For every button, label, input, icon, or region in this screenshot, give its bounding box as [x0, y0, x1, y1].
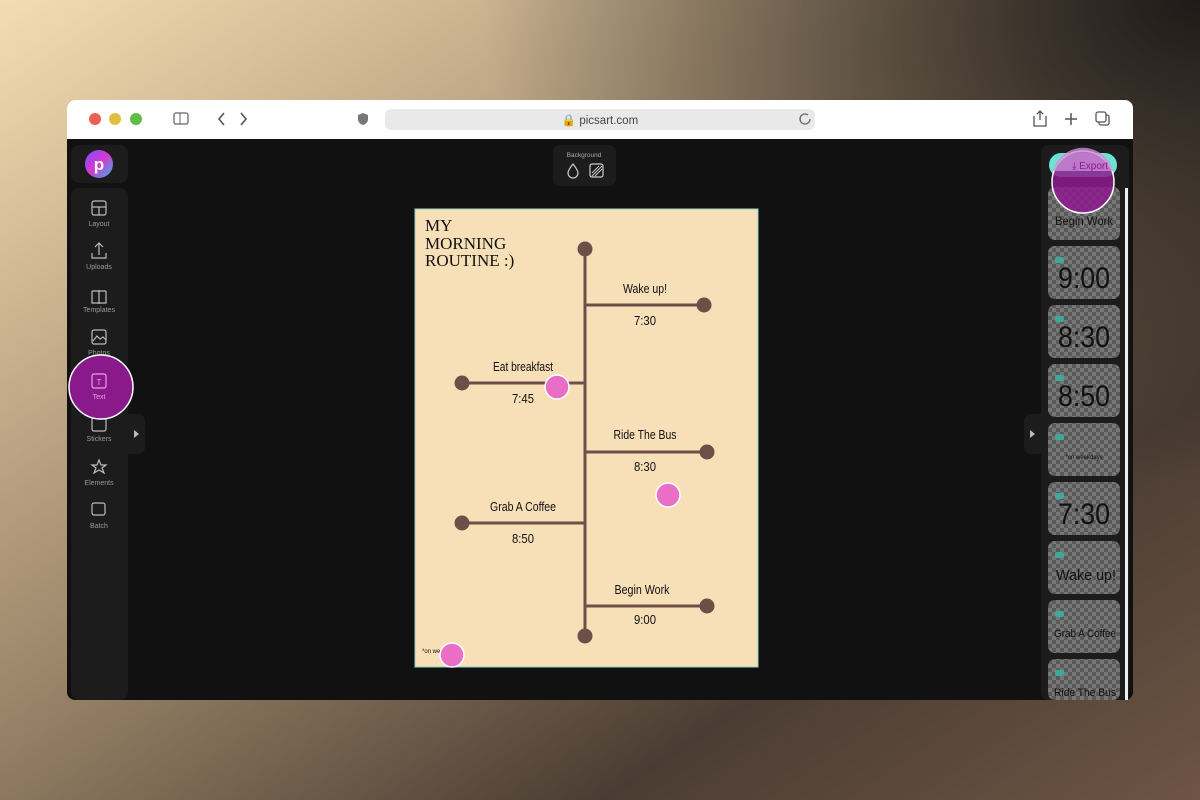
right layers panel: Grab A Coffee [1054, 628, 1116, 640]
address bar [385, 109, 815, 130]
left sidebar: Elements [84, 480, 114, 487]
left sidebar: Layout [88, 221, 110, 228]
title: ROUTINE :) [425, 251, 514, 270]
export button [1049, 148, 1117, 213]
timeline [462, 249, 707, 636]
canvas poster: 7:30 [634, 314, 656, 328]
right layers panel: 9:00 [1058, 262, 1110, 295]
right layers panel: Begin Work [1055, 214, 1114, 228]
labels: Wake up! [623, 282, 667, 296]
canvas poster: 9:00 [634, 613, 656, 627]
right layers panel [1024, 145, 1129, 700]
left sidebar: Templates [83, 307, 115, 314]
left sidebar: Batch [90, 523, 108, 530]
right layers panel: *on weekdays [1065, 455, 1103, 461]
left sidebar: Uploads [86, 264, 112, 271]
highlight: Text tool: Text [93, 394, 105, 401]
browser window [67, 100, 1133, 700]
canvas poster: Grab A Coffee [490, 500, 556, 514]
right layers panel: Wake up! [1056, 567, 1116, 584]
left sidebar: Stickers [87, 436, 112, 443]
left sidebar: p [94, 155, 104, 174]
left sidebar: Photos [88, 350, 110, 357]
browser toolbar [67, 100, 1133, 139]
canvas poster: *on weekdays [422, 649, 459, 655]
title: MY [425, 216, 452, 235]
canvas poster: Eat breakfast [493, 360, 553, 374]
highlight: Text tool: T [97, 378, 102, 387]
canvas poster: 8:50 [512, 532, 534, 546]
title: MORNING [425, 234, 506, 253]
canvas poster: Begin Work [614, 583, 670, 597]
canvas poster: 8:30 [634, 460, 656, 474]
background toolbar [553, 145, 616, 186]
right layers panel: 8:30 [1058, 321, 1110, 354]
canvas poster: 7:45 [512, 392, 534, 406]
right layers panel: 8:50 [1058, 380, 1110, 413]
export button: ⤓ Export [1072, 161, 1108, 172]
right layers panel: 7:30 [1058, 498, 1110, 531]
canvas poster: Ride The Bus [614, 428, 676, 442]
touch markers [440, 375, 680, 667]
background toolbar: Background [567, 152, 602, 159]
right layers panel: Ride The Bus [1054, 687, 1116, 699]
highlight: Text tool [69, 355, 133, 419]
left sidebar [71, 145, 145, 700]
canvas poster [415, 209, 758, 667]
address bar: 🔒 picsart.com [562, 114, 638, 127]
